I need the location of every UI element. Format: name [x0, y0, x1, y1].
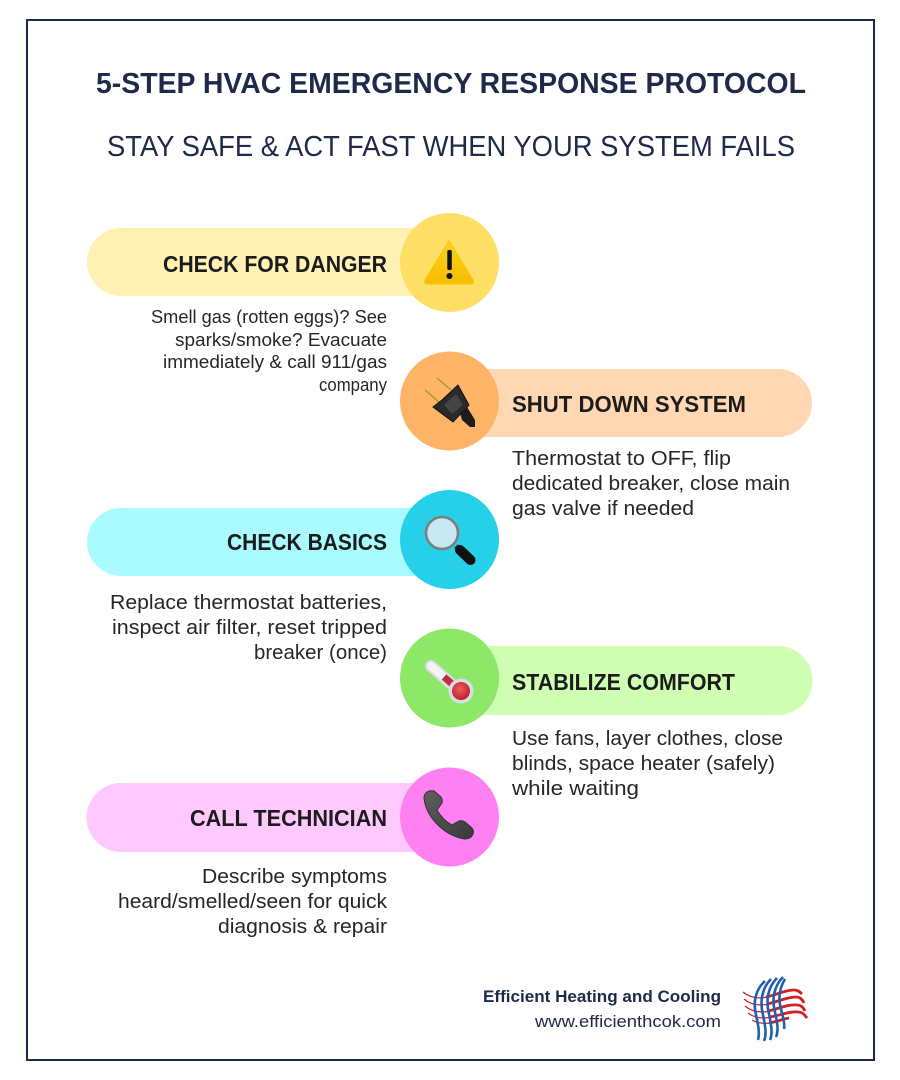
footer website: www.efficienthcok.com	[534, 1012, 721, 1031]
logo: waving flag weave	[743, 977, 807, 1041]
step 3 description: breaker (once)	[254, 641, 387, 664]
step 3 description: Replace thermostat batteries,	[110, 591, 387, 614]
icon: warning triangle	[425, 241, 473, 284]
step 2 description: Thermostat to OFF, flip	[512, 447, 731, 470]
step 5 description: diagnosis & repair	[218, 915, 387, 938]
step 1 description: sparks/smoke? Evacuate	[175, 329, 387, 350]
icon: magnifying glass	[426, 517, 470, 560]
step 1 description	[151, 306, 388, 395]
step 3 circle	[400, 490, 499, 589]
icon: power plug	[425, 378, 475, 427]
step 2 heading: SHUT DOWN SYSTEM	[512, 391, 746, 417]
icon: thermometer	[431, 666, 474, 704]
step 1: check for danger	[87, 213, 499, 395]
step 2 circle	[400, 352, 499, 450]
step 2 description	[512, 447, 790, 520]
step 4 circle	[400, 628, 499, 728]
step 3 description	[110, 591, 387, 664]
subtitle: STAY SAFE & ACT FAST WHEN YOUR SYSTEM FAILS	[107, 131, 795, 163]
step 3 heading: CHECK BASICS	[227, 529, 387, 555]
step 1 description: immediately & call 911/gas	[163, 351, 387, 372]
step 4 description: blinds, space heater (safely)	[512, 752, 775, 775]
step 5: call technician	[87, 768, 499, 938]
step 4 heading: STABILIZE COMFORT	[512, 669, 735, 695]
step 5 circle	[400, 768, 499, 866]
step 3 description: inspect air filter, reset tripped	[112, 616, 387, 639]
icon: telephone handset	[424, 791, 474, 839]
step 5 description: Describe symptoms	[202, 865, 387, 888]
step 5 pill	[87, 783, 430, 852]
step 2 description: gas valve if needed	[512, 497, 694, 520]
step 4 description	[511, 727, 783, 800]
step 5 description	[118, 865, 388, 938]
step 4 description: while waiting	[511, 777, 639, 800]
step 2 description: dedicated breaker, close main	[512, 472, 790, 495]
step 1 description: company	[319, 374, 388, 395]
step 3: check basics	[87, 490, 499, 664]
step 2: shut down system	[400, 352, 812, 520]
step 1 pill	[87, 228, 430, 296]
step 5 description: heard/smelled/seen for quick	[118, 890, 388, 913]
step 1 heading: CHECK FOR DANGER	[163, 251, 387, 277]
step 2 pill	[470, 369, 812, 437]
step 3 pill	[87, 508, 430, 576]
footer company name: Efficient Heating and Cooling	[483, 987, 721, 1006]
step 5 heading: CALL TECHNICIAN	[190, 805, 387, 831]
step 1 description: Smell gas (rotten eggs)? See	[151, 306, 387, 327]
title: 5-STEP HVAC EMERGENCY RESPONSE PROTOCOL	[96, 68, 806, 100]
step 1 circle	[400, 213, 499, 312]
step 4 description: Use fans, layer clothes, close	[512, 727, 783, 750]
step 4 pill	[470, 646, 813, 715]
step 4: stabilize comfort	[400, 628, 813, 800]
